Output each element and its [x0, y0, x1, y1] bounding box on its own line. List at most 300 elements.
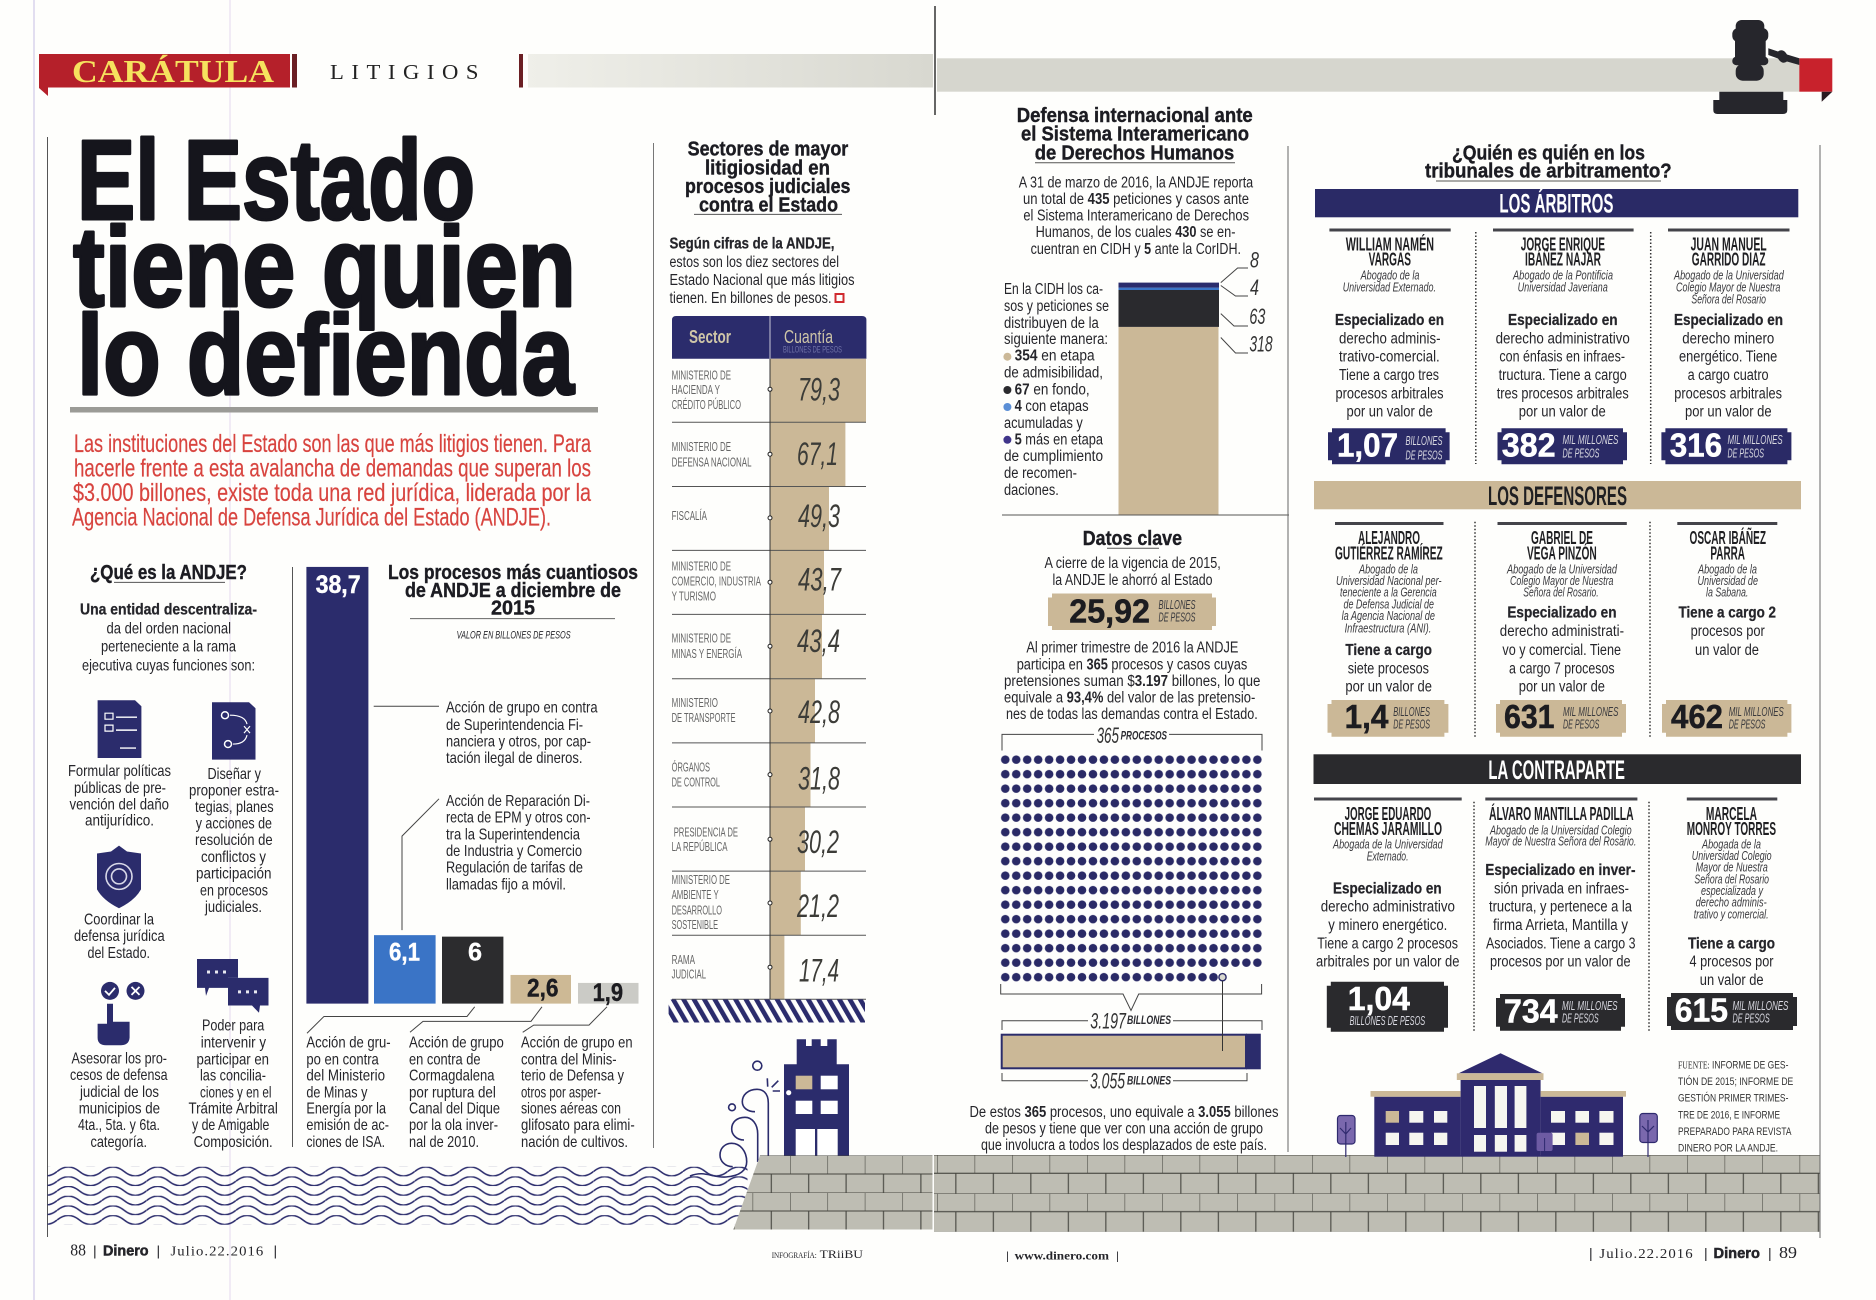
- text: formular políticas: vención del daño: [70, 796, 169, 813]
- card: Álvaro Mantilla: 734: [1504, 992, 1558, 1029]
- row: minas: MINAS Y ENERGÍA: [672, 646, 742, 661]
- footer: right page folio: |: [1768, 1245, 1772, 1261]
- card: Álvaro Mantilla: procesos por un valor de: [1490, 954, 1631, 971]
- heading: Datos clave: [1083, 528, 1182, 550]
- paragraph: desplazados: de pesos y tiene que ver con una acción de grupo: [985, 1121, 1263, 1138]
- icon: strategy diagram: [212, 702, 256, 760]
- text: distribución de casos: 67 en fondo,: [1015, 382, 1090, 398]
- text: poder para intervenir: Poder para: [202, 1018, 265, 1035]
- red tab: [1799, 58, 1832, 92]
- card: Álvaro Mantilla: ÁLVARO MANTILLA PADILLA: [1489, 803, 1634, 824]
- text: distribución de casos: [1003, 281, 1109, 499]
- bar chart: 6: [468, 939, 482, 967]
- row: ambiente: [672, 872, 839, 932]
- text: coordinar: del Estado.: [88, 945, 150, 962]
- footer: infographic credit: [772, 1247, 863, 1261]
- paragraph: [1019, 174, 1253, 258]
- text: asesorar: municipios de: [79, 1100, 160, 1117]
- text: distribución de casos: de admisibilidad,: [1004, 365, 1103, 382]
- footer: right page folio: Julio.22.2016: [1599, 1247, 1694, 1262]
- card: Jorge Eduardo Chemas: arbitrales por un valor de: [1316, 954, 1460, 971]
- card: Gabriel de Vega: Señora del Rosario.: [1523, 585, 1599, 600]
- text: poder para intervenir: y de Amigable: [192, 1117, 269, 1134]
- text: ministerio de defensa: contra del Minis-: [521, 1052, 617, 1069]
- callout: EPM: Acción de Reparación Di-: [446, 793, 590, 810]
- callout: EPM: [402, 793, 590, 930]
- callout: EPM: de Industria y Comercio: [446, 843, 582, 860]
- text: cormagdalena: [409, 1035, 504, 1151]
- card: Marcela Monroy: Universidad Colegio: [1692, 848, 1772, 863]
- row: comercio: MINISTERIO DE: [672, 559, 731, 574]
- source note: DINERO POR LA ANDJE.: [1678, 1143, 1778, 1155]
- bracket: 3.197 billones: BILLONES: [1127, 1015, 1171, 1027]
- callout: superintendencia: tación ilegal de dineros.: [446, 750, 582, 767]
- dot grid: 365 procesos: [1000, 752, 1263, 1051]
- footer: infographic credit: INFOGRAFÍA:: [772, 1250, 817, 1260]
- banner: CARÁTULA: [39, 53, 290, 96]
- text: ministerio de minas: [306, 1035, 391, 1151]
- value box: 25,92: DE PESOS: [1158, 610, 1196, 624]
- card: Alejandro Gutiérrez: Tiene a cargo: [1345, 642, 1432, 659]
- text: formular políticas: públicas de pre-: [74, 780, 166, 797]
- card: William Namén: 1,07: [1337, 427, 1398, 464]
- card: William Namén: Universidad Externado.: [1343, 280, 1436, 295]
- bar chart: 6,1: [389, 939, 420, 967]
- footer: website: |: [1116, 1250, 1119, 1262]
- card: Juan Manuel Garrido: Colegio Mayor de Nuestra: [1676, 280, 1780, 295]
- card: Álvaro Mantilla: Asociados. Tiene a cargo 3: [1486, 935, 1636, 952]
- heading: quién es quién: tribunales de arbitramento?: [1425, 160, 1672, 182]
- table header: Sector: [689, 327, 731, 347]
- card: Oscar Ibáñez: 462: [1671, 698, 1723, 735]
- card: Alejandro Gutiérrez: teneciente a la Gerencia: [1340, 585, 1437, 600]
- card: Álvaro Mantilla: [1485, 798, 1637, 1031]
- source note: PREPARADO PARA REVISTA: [1678, 1126, 1792, 1138]
- row: fiscalía: FISCALÍA: [672, 508, 707, 523]
- icon: document checklist: [98, 700, 141, 758]
- illustration: right brick wall: [934, 1155, 1820, 1232]
- card: Oscar Ibáñez: Abogado de la: [1697, 561, 1757, 576]
- text: diseñar: en procesos: [200, 882, 268, 899]
- card: Jorge Enrique Ibáñez: Abogado de la Pontificia: [1512, 267, 1613, 282]
- footer: website: |: [1006, 1250, 1009, 1262]
- text: diseñar: participación: [196, 865, 272, 882]
- card: Alejandro Gutiérrez: Universidad Nacional per-: [1336, 573, 1442, 588]
- card: Marcela Monroy: [1667, 798, 1797, 1030]
- row: hacienda: MINISTERIO DE: [672, 368, 731, 383]
- row: comercio: [672, 559, 842, 604]
- intro paragraph: perteneciente a la rama: [101, 639, 236, 656]
- card: Álvaro Mantilla: Especializado en inver-: [1485, 862, 1636, 879]
- card: Juan Manuel Garrido: procesos arbitrales: [1674, 385, 1782, 402]
- text: ministerio de minas: Acción de gru-: [306, 1035, 391, 1052]
- text: diseñar: judiciales.: [204, 899, 262, 916]
- card: Gabriel de Vega: a cargo 7 procesos: [1509, 660, 1615, 677]
- card: Oscar Ibáñez: Universidad de: [1698, 573, 1758, 588]
- row: presidencia: [672, 824, 839, 860]
- band: la contraparte: [1314, 754, 1801, 785]
- callout: EPM: tra la Superintendencia: [446, 827, 580, 844]
- heading: [388, 562, 638, 620]
- row: transporte: [672, 694, 840, 730]
- card: William Namén: Abogado de la: [1360, 267, 1420, 282]
- source note: [1678, 1059, 1793, 1155]
- card: Jorge Eduardo Chemas: JORGE EDUARDO: [1345, 803, 1431, 824]
- heading: de Derechos Humanos: [1035, 142, 1234, 164]
- intro paragraph: da del orden nacional: [106, 621, 231, 638]
- text: cormagdalena: en contra de: [409, 1052, 481, 1069]
- card: Jorge Enrique Ibáñez: 382: [1502, 427, 1556, 464]
- section label: LITIGIOS: LITIGIOS: [330, 60, 486, 84]
- card: Alejandro Gutiérrez: Abogado de la: [1358, 561, 1418, 576]
- card: Marcela Monroy: 4 procesos por: [1690, 954, 1774, 971]
- card: Alejandro Gutiérrez: siete procesos: [1348, 660, 1429, 677]
- text: ministerio de minas: de Minas y: [306, 1084, 368, 1101]
- card: Alejandro Gutiérrez: de Defensa Judicial de: [1344, 596, 1434, 611]
- table header: Cuantía: [784, 327, 834, 347]
- text: cormagdalena: por la ola inver-: [409, 1117, 498, 1134]
- card: Oscar Ibáñez: DE PESOS: [1729, 717, 1766, 731]
- card: Alejandro Gutiérrez: DE PESOS: [1393, 717, 1430, 731]
- footer: left page folio: |: [156, 1243, 160, 1259]
- text: ahorro: [1044, 555, 1221, 589]
- paragraph: [1004, 640, 1260, 723]
- text: cormagdalena: Acción de grupo: [409, 1035, 504, 1052]
- footer: left page folio: 88: [70, 1241, 86, 1260]
- card: Marcela Monroy: Señora del Rosario: [1694, 871, 1769, 886]
- row: hacienda: [672, 368, 840, 412]
- card: Gabriel de Vega: MIL MILLONES: [1563, 705, 1619, 719]
- card: Álvaro Mantilla: MIL MILLONES: [1562, 998, 1618, 1013]
- footer: right page folio: [1589, 1243, 1797, 1262]
- card: Gabriel de Vega: por un valor de: [1519, 679, 1605, 696]
- paragraph: un total de 435 peticiones y casos ante: [1023, 191, 1249, 208]
- illustration: institutional building: [1370, 1053, 1626, 1157]
- card: Jorge Eduardo Chemas: [1314, 798, 1462, 1032]
- footer: infographic credit: TRiiBU: [820, 1247, 863, 1261]
- bracket: 365 procesos: PROCESOS: [1121, 730, 1167, 742]
- icon: tree right: [1640, 1114, 1657, 1157]
- card: Alejandro Gutiérrez: 1,4: [1345, 698, 1389, 735]
- stacked bar chart: 63: [1249, 304, 1266, 329]
- row: comercio: COMERCIO, INDUSTRIA: [672, 573, 761, 588]
- text: diseñar: Diseñar y: [208, 766, 261, 783]
- text: asesorar: 4ta., 5ta. y 6ta.: [78, 1117, 160, 1134]
- text: ministerio de defensa: glifosato para elimi-: [521, 1117, 635, 1134]
- icon: gavel: [1713, 20, 1799, 114]
- footer: right page folio: Dinero: [1714, 1245, 1760, 1262]
- intro paragraph: [670, 235, 855, 307]
- text: ministerio de minas: po en contra: [306, 1052, 379, 1069]
- row: hacienda: HACIENDA Y: [672, 382, 720, 397]
- card: William Namén: derecho adminis-: [1339, 330, 1440, 347]
- card: William Namén: DE PESOS: [1406, 447, 1443, 462]
- card: Gabriel de Vega: Abogado de la Universidad: [1506, 561, 1618, 576]
- stacked bar chart: [1118, 248, 1273, 515]
- text: formular políticas: antijurídico.: [85, 813, 154, 830]
- card: Alejandro Gutiérrez: [1328, 522, 1448, 737]
- heading: [1017, 105, 1253, 164]
- paragraph: equivale a 93,4% del valor de las pretensio-: [1004, 689, 1255, 706]
- heading: de ANDJE a diciembre de: [405, 580, 621, 602]
- text: ministerio de defensa: siones aéreas con: [521, 1100, 621, 1117]
- band: los árbitros: [1315, 188, 1798, 219]
- card: Gabriel de Vega: derecho administrati-: [1500, 623, 1624, 640]
- paragraph: desplazados: que involucra a todos los desplazados de este país.: [981, 1137, 1267, 1154]
- row: ambiente: DESARROLLO: [672, 902, 722, 917]
- text: diseñar: resolución de: [195, 832, 273, 849]
- card: Oscar Ibáñez: procesos por: [1691, 623, 1765, 640]
- value box: 25,92: [1048, 592, 1216, 630]
- card: Juan Manuel Garrido: JUAN MANUEL: [1691, 234, 1767, 255]
- stacked bar chart: 4: [1250, 275, 1259, 300]
- card: William Namén: Especializado en: [1335, 312, 1444, 329]
- table header: BILLONES DE PESOS: [783, 345, 842, 355]
- unit note: VALOR EN BILLONES DE PESOS: [457, 630, 571, 642]
- row: transporte: 42,8: [798, 694, 840, 730]
- card: Jorge Eduardo Chemas: Abogada de la Universidad: [1332, 836, 1443, 851]
- card: Marcela Monroy: Tiene a cargo: [1688, 935, 1775, 952]
- card: Jorge Eduardo Chemas: Especializado en: [1333, 880, 1442, 897]
- intro text: [72, 430, 591, 532]
- panel: sectores de mayor litigiosidad: [669, 138, 866, 1022]
- row: minas: 43,4: [797, 623, 840, 659]
- paragraph: nes de todas las demandas contra el Estado.: [1006, 706, 1258, 723]
- icon: check and cross with hand: [98, 982, 144, 1045]
- card: Jorge Eduardo Chemas: Externado.: [1367, 849, 1408, 864]
- callout: EPM: recta de EPM y otros con-: [446, 810, 590, 827]
- card: Marcela Monroy: 615: [1675, 992, 1728, 1029]
- row: defensa: 67,1: [797, 436, 838, 472]
- text: asesorar: cesos de defensa: [70, 1067, 168, 1084]
- text: cormagdalena: Cormagdalena: [409, 1067, 495, 1084]
- row: órganos de control: ÓRGANOS: [672, 760, 710, 775]
- card: Marcela Monroy: especializada y: [1701, 883, 1764, 898]
- panel: qué es la ANDJE: [68, 562, 279, 1151]
- source note: TIÓN DE 2015; INFORME DE: [1678, 1075, 1793, 1088]
- card: William Namén: por un valor de: [1346, 404, 1433, 421]
- text: coordinar: defensa jurídica: [74, 928, 165, 945]
- card: Marcela Monroy: MONROY TORRES: [1687, 818, 1776, 839]
- card: Jorge Eduardo Chemas: y minero energético.: [1328, 917, 1447, 934]
- intro text: Las instituciones del Estado son las que más litigios tienen. Para: [74, 430, 591, 458]
- row: ambiente: AMBIENTE Y: [672, 887, 719, 902]
- intro text: hacerle frente a esta avalancha de demandas que superan los: [74, 454, 591, 482]
- heading: 2015: [491, 598, 535, 620]
- text: poder para intervenir: ciones y en el: [200, 1084, 272, 1101]
- bracket: 3.197 billones: 3.197: [1090, 1008, 1126, 1033]
- row: rama judicial: RAMA: [672, 952, 695, 967]
- illustration: castle building: [690, 1039, 849, 1177]
- card: William Namén: Tiene a cargo tres: [1339, 367, 1439, 384]
- card: Jorge Enrique Ibáñez: tructura. Tiene a cargo: [1499, 367, 1627, 384]
- text: formular políticas: Formular políticas: [68, 763, 171, 780]
- title: tiene quien: [73, 204, 576, 330]
- text: ministerio de defensa: otros por asper-: [521, 1084, 601, 1101]
- card: Juan Manuel Garrido: por un valor de: [1685, 404, 1772, 421]
- row: rama judicial: 17,4: [799, 953, 839, 989]
- card: Jorge Eduardo Chemas: derecho administrativo: [1321, 899, 1455, 916]
- paragraph: Al primer trimestre de 2016 la ANDJE: [1026, 640, 1238, 657]
- bar chart: 38,7: [316, 571, 361, 599]
- footer: left page folio: |: [93, 1243, 97, 1259]
- bracket: 365 procesos: 365: [1097, 723, 1119, 748]
- text: distribución de casos: sos y peticiones se: [1004, 298, 1109, 315]
- text: ministerio de defensa: [521, 1035, 635, 1151]
- paragraph: participa en 365 procesos y casos cuyas: [1017, 656, 1247, 673]
- card: William Namén: procesos arbitrales: [1336, 385, 1444, 402]
- heading: litigiosidad en: [705, 158, 830, 180]
- row: rama judicial: JUDICIAL: [672, 967, 706, 982]
- card: Jorge Enrique Ibáñez: JORGE ENRIQUE: [1521, 234, 1605, 255]
- callout: EPM: llamadas fijo a móvil.: [446, 876, 566, 893]
- value box: 25,92: 25,92: [1069, 592, 1150, 629]
- text: formular políticas: [68, 763, 171, 830]
- card: Jorge Enrique Ibáñez: [1493, 228, 1634, 464]
- paragraph: Humanos, de los cuales 430 se en-: [1036, 224, 1236, 241]
- row: presidencia: LA REPÚBLICA: [672, 839, 728, 854]
- text: ministerio de minas: ciones de ISA.: [306, 1134, 385, 1151]
- panel: datos clave: [970, 528, 1279, 1154]
- row: transporte: MINISTERIO: [672, 695, 718, 710]
- row: ambiente: SOSTENIBLE: [672, 917, 718, 932]
- card: Jorge Eduardo Chemas: CHEMAS JARAMILLO: [1334, 818, 1442, 839]
- card: Jorge Enrique Ibáñez: tres procesos arbitrales: [1497, 385, 1629, 402]
- title: El Estado: [77, 117, 475, 243]
- paragraph: pretensiones suman $3.197 billones, lo que: [1004, 673, 1260, 690]
- text: ahorro: A cierre de la vigencia de 2015,: [1044, 555, 1221, 572]
- callout: superintendencia: Acción de grupo en contra: [446, 700, 598, 717]
- card: Marcela Monroy: MIL MILLONES: [1732, 998, 1789, 1013]
- card: Jorge Enrique Ibáñez: con énfasis en infraes-: [1499, 349, 1625, 366]
- text: distribución de casos: de cumplimiento: [1004, 448, 1103, 465]
- value box: 25,92: BILLONES: [1158, 598, 1196, 612]
- illustration: left brick wall: [733, 1156, 932, 1230]
- heading: contra el Estado: [699, 194, 838, 216]
- intro text: Agencia Nacional de Defensa Jurídica del Estado (ANDJE).: [72, 504, 551, 532]
- text: diseñar: tegias, planes: [195, 799, 274, 816]
- bars and rows: [672, 359, 866, 999]
- card: Álvaro Mantilla: firma Arrieta, Mantilla y: [1493, 917, 1628, 934]
- card: Gabriel de Vega: vo y comercial. Tiene: [1502, 642, 1621, 659]
- intro paragraph: ejecutiva cuyas funciones son:: [82, 657, 255, 674]
- band: los defensores: [1314, 481, 1801, 511]
- text: poder para intervenir: participar en: [196, 1052, 269, 1069]
- card: Juan Manuel Garrido: GARRIDO DIAZ: [1692, 249, 1766, 270]
- card: Juan Manuel Garrido: Señora del Rosario: [1691, 291, 1766, 306]
- text: cormagdalena: nal de 2010.: [409, 1134, 479, 1151]
- heading: quién es quién: ¿Quién es quién en los: [1452, 142, 1645, 164]
- callout: superintendencia: nanciera y otros, por cap-: [446, 734, 591, 751]
- card: Jorge Enrique Ibáñez: derecho administrativo: [1496, 330, 1630, 347]
- card: William Namén: WILLIAM NAMÉN: [1346, 234, 1434, 255]
- heading: el Sistema Interamericano: [1021, 124, 1249, 146]
- text: diseñar: y acciones de: [196, 816, 272, 833]
- card: Juan Manuel Garrido: derecho minero: [1682, 330, 1774, 347]
- bracket: 365 procesos: [1002, 723, 1262, 750]
- row: comercio: 43,7: [798, 562, 842, 598]
- text: distribución de casos: siguiente manera:: [1004, 331, 1108, 348]
- row: defensa: MINISTERIO DE: [672, 439, 731, 454]
- banner: CARÁTULA: CARÁTULA: [72, 53, 274, 89]
- text: poder para intervenir: Composición.: [194, 1134, 273, 1151]
- text: distribución de casos: distribuyen de la: [1004, 315, 1099, 332]
- card: Juan Manuel Garrido: energético. Tiene: [1679, 349, 1777, 366]
- card: Jorge Enrique Ibáñez: IBÁÑEZ NAJAR: [1525, 249, 1601, 270]
- card: Alejandro Gutiérrez: Infraestructura (ANI).: [1345, 620, 1431, 635]
- heading: [685, 138, 850, 216]
- row: rama judicial: [672, 952, 839, 989]
- text: asesorar: categoría.: [90, 1134, 147, 1151]
- text: distribución de casos: acumuladas y: [1004, 415, 1083, 432]
- title: lo defienda: [77, 292, 575, 418]
- intro paragraph: Estado Nacional que más litigios: [670, 272, 855, 289]
- text: poder para intervenir: Trámite Arbitral: [188, 1100, 278, 1117]
- paragraph: desplazados: [970, 1104, 1279, 1154]
- card: Jorge Enrique Ibáñez: Universidad Javeriana: [1518, 280, 1608, 295]
- card: Oscar Ibáñez: un valor de: [1695, 642, 1759, 659]
- band: los árbitros: LOS ÁRBITROS: [1499, 188, 1613, 219]
- heading: Sectores de mayor: [688, 138, 848, 160]
- intro paragraph: estos son los diez sectores del: [670, 254, 839, 271]
- card: Oscar Ibáñez: Tiene a cargo 2: [1678, 605, 1776, 622]
- card: Jorge Enrique Ibáñez: por un valor de: [1519, 404, 1606, 421]
- card: Juan Manuel Garrido: 316: [1670, 427, 1722, 464]
- row: defensa: DEFENSA NACIONAL: [672, 455, 752, 470]
- card: Gabriel de Vega: VEGA PINZÓN: [1527, 542, 1597, 563]
- footer: right page folio: 89: [1779, 1243, 1797, 1262]
- paragraph: cuentran en CIDH y 5 ante la CorIDH.: [1031, 241, 1241, 258]
- heading: quién es quién: [1425, 142, 1672, 182]
- text: poder para intervenir: las concilia-: [200, 1067, 266, 1084]
- card: Juan Manuel Garrido: MIL MILLONES: [1728, 432, 1783, 447]
- header: right page bar with gavel: [937, 20, 1832, 114]
- card: Gabriel de Vega: [1496, 522, 1627, 737]
- text: ministerio de minas: emisión de ac-: [306, 1117, 389, 1134]
- row: ambiente: 21,2: [796, 888, 839, 924]
- card: Álvaro Mantilla: tructura, y pertenece a la: [1489, 899, 1632, 916]
- card: Juan Manuel Garrido: Especializado en: [1674, 312, 1783, 329]
- row: ambiente: MINISTERIO DE: [672, 872, 730, 887]
- row: comercio: Y TURISMO: [672, 588, 716, 604]
- footer: website: www.dinero.com: [1015, 1248, 1109, 1262]
- card: Alejandro Gutiérrez: por un valor de: [1345, 679, 1432, 696]
- card: Juan Manuel Garrido: Abogado de la Universidad: [1673, 267, 1784, 282]
- text: ministerio de minas: del Ministerio: [306, 1067, 385, 1084]
- card: William Namén: trativo-comercial.: [1339, 349, 1440, 366]
- row: órganos de control: 31,8: [798, 760, 840, 796]
- intro paragraph: tienen. En billones de pesos.: [670, 290, 832, 307]
- text: diseñar: [189, 766, 279, 916]
- text: cormagdalena: por ruptura del: [409, 1084, 496, 1101]
- card: Gabriel de Vega: DE PESOS: [1563, 717, 1600, 731]
- heading: Defensa internacional ante: [1017, 105, 1253, 127]
- card: William Namén: [1328, 228, 1451, 464]
- panel: defensa internacional: [1003, 105, 1273, 515]
- footer: left page folio: Dinero: [103, 1243, 149, 1260]
- text: distribución de casos: En la CIDH los ca-: [1004, 281, 1103, 298]
- icon: speech bubbles: [197, 959, 268, 1013]
- card: Jorge Eduardo Chemas: BILLONES DE PESOS: [1350, 1013, 1425, 1028]
- text: asesorar: Asesorar los pro-: [72, 1051, 167, 1068]
- icon: tree left: [1338, 1116, 1355, 1157]
- callout: superintendencia: [374, 700, 598, 767]
- paragraph: A 31 de marzo de 2016, la ANDJE reporta: [1019, 174, 1253, 191]
- heading: procesos judiciales: [685, 176, 850, 198]
- illustration: waves: [48, 1167, 748, 1225]
- callout: superintendencia: de Superintendencia Fi-: [446, 717, 583, 734]
- card: Marcela Monroy: Mayor de Nuestra: [1696, 860, 1768, 875]
